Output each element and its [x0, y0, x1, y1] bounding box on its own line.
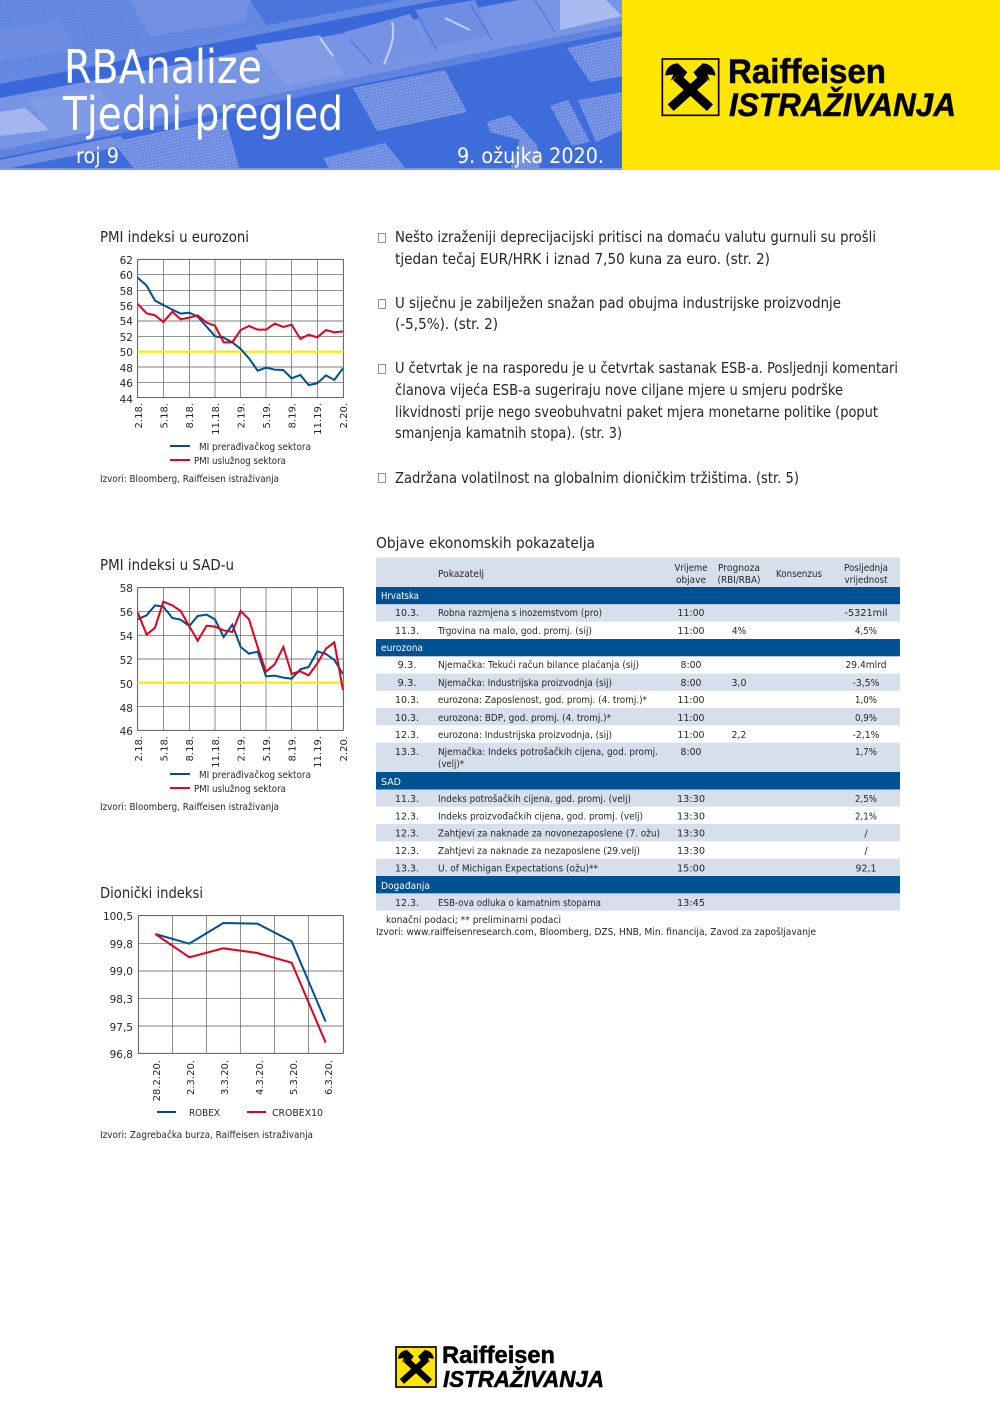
chart legend: CROBEX10	[272, 1108, 323, 1119]
bullet 3: likvidnosti prije nego sveobuhvatni paket mjera monetarne politike (poput	[395, 403, 878, 421]
chart heading: PMI indeksi u SAD-u	[100, 556, 234, 574]
row: U. of Michigan Expectations (ožu)**	[438, 862, 598, 874]
line chart: 50	[120, 347, 133, 359]
row	[376, 893, 900, 911]
header banner	[0, 0, 622, 170]
line chart: 48	[120, 703, 133, 715]
table header row: Posljednja	[844, 563, 888, 574]
section: eurozona	[376, 639, 900, 656]
line chart: 5.19.	[262, 736, 273, 761]
row: 15:00	[677, 864, 705, 874]
row: 4,5%	[855, 626, 877, 637]
yellow logo panel	[622, 0, 1000, 170]
bullet 2	[378, 294, 841, 333]
section: Događanja: Događanja	[381, 881, 430, 892]
line chart: 8.19.	[288, 736, 298, 761]
bullet 1: Nešto izraženiji deprecijacijski pritisci na domaću valutu gurnuli su prošli	[395, 228, 876, 246]
table header row: Konsenzus	[776, 569, 822, 580]
chart legend: PMI uslužnog sektora	[194, 783, 286, 795]
row: Njemačka: Indeks potrošačkih cijena, god. promj.	[438, 746, 658, 758]
chart legend	[157, 1108, 323, 1119]
row: 10.3.	[395, 608, 419, 619]
table footnotes: konačni podaci; ** preliminarni podaci	[386, 914, 561, 926]
line chart: 28.2.20.	[152, 1060, 163, 1101]
row: 10.3.	[395, 713, 419, 724]
chart legend: PMI uslužnog sektora	[194, 455, 286, 467]
panel: economic releases table	[376, 534, 900, 938]
chart legend: ROBEX	[189, 1108, 220, 1119]
bullet 3	[378, 359, 898, 442]
line chart: 52	[120, 332, 133, 344]
brand name: Raiffeisen	[728, 53, 886, 91]
issue number: roj 9	[76, 144, 119, 168]
row: 11.3.	[395, 794, 419, 805]
table heading: Objave ekonomskih pokazatelja	[376, 534, 595, 552]
bullet 4: Zadržana volatilnost na globalnim dioničkim tržištima. (str. 5)	[395, 469, 799, 487]
panel: PMI USA chart	[100, 556, 350, 813]
line chart: 52	[120, 655, 133, 667]
row: 10.3.	[395, 695, 419, 706]
row: Njemačka: Tekući račun bilance plaćanja (sij)	[438, 659, 639, 671]
line chart: 100,5	[103, 911, 133, 923]
row: 12.3.	[395, 898, 419, 909]
line chart: 46	[120, 726, 133, 738]
row	[376, 859, 900, 876]
row: -5321mil	[844, 608, 888, 619]
row: 12.3.	[395, 828, 419, 840]
row: 2,2	[732, 730, 746, 741]
line chart: 58	[120, 286, 133, 298]
row: 11.3.	[395, 626, 419, 637]
line chart: 50	[120, 679, 133, 691]
row: 8:00	[680, 660, 702, 671]
section: eurozona: eurozona	[381, 643, 423, 654]
line chart: 2.18.	[134, 403, 145, 428]
section: Hrvatska: Hrvatska	[381, 591, 419, 602]
line chart: 11.19.	[313, 736, 324, 768]
row: 8:00	[680, 747, 702, 758]
row: Njemačka: Industrijska proizvodnja (sij)	[438, 677, 612, 689]
row: 12.3.	[395, 846, 419, 857]
brand division: ISTRAŽIVANJA	[443, 1365, 604, 1392]
row	[395, 810, 877, 822]
chart legend: MI prerađivačkog sektora	[199, 441, 311, 453]
row: ESB-ova odluka o kamatnim stopama	[438, 898, 601, 909]
row: 13:30	[677, 794, 705, 805]
row	[376, 674, 900, 691]
section: Hrvatska	[376, 587, 900, 604]
row: Indeks proizvođačkih cijena, god. promj. (velj)	[438, 810, 643, 822]
row: Robna razmjena s inozemstvom (pro)	[438, 608, 602, 619]
row: 29.4mlrd	[846, 660, 886, 671]
table header row: Pokazatelj	[438, 569, 484, 580]
row: /	[864, 828, 868, 840]
row: Zahtjevi za naknade za nezaposlene (29.velj)	[438, 846, 640, 857]
table footnotes	[376, 914, 816, 938]
row	[398, 659, 886, 671]
brand name: Raiffeisen	[442, 1342, 555, 1369]
chart heading: Dionički indeksi	[100, 884, 203, 902]
row: 12.3.	[395, 730, 419, 741]
row: 11:00	[678, 730, 704, 741]
row: 11:00	[678, 713, 704, 724]
row: 13:30	[677, 812, 705, 822]
row	[395, 695, 877, 706]
line chart: 99,0	[110, 966, 133, 978]
line chart: 44	[120, 394, 133, 406]
row: 92,1	[856, 864, 876, 874]
bullet 2: (-5,5%). (str. 2)	[395, 315, 498, 333]
line chart: 4.3.20.	[255, 1060, 266, 1095]
row: 12.3.	[395, 812, 419, 822]
chart source: Izvori: Zagrebačka burza, Raiffeisen istraživanja	[100, 1129, 313, 1141]
bullet 3: U četvrtak je na rasporedu je u četvrtak sastanak ESB-a. Posljednji komentari	[395, 359, 898, 377]
table header row: (RBI/RBA)	[718, 575, 760, 586]
bullet 3: članova vijeća ESB-a sugeriraju nove ciljane mjere u smjeru podrške	[395, 381, 843, 399]
line chart: 5.18.	[160, 736, 170, 761]
row: 11:00	[678, 695, 704, 706]
row: 9.3.	[398, 678, 416, 689]
line chart: 11.18.	[211, 403, 222, 435]
line chart: 98,3	[110, 994, 133, 1006]
table header row: objave	[676, 575, 706, 586]
row: 11:00	[678, 608, 704, 619]
section: SAD	[376, 772, 900, 790]
row: 13:30	[677, 846, 705, 857]
line chart: 5.3.20.	[289, 1060, 300, 1095]
chart source: Izvori: Bloomberg, Raiffeisen istraživanja	[100, 801, 279, 813]
line chart: 48	[120, 363, 133, 375]
row: 8:00	[680, 678, 702, 689]
row	[376, 743, 900, 772]
chart legend	[170, 441, 311, 467]
row: Zahtjevi za naknade za novonezaposlene (7. ožu)	[438, 828, 660, 840]
line chart: 56	[120, 301, 133, 313]
line chart: 2.20.	[339, 403, 350, 428]
line chart: 54	[120, 631, 133, 643]
line chart: 99,8	[110, 939, 133, 951]
row	[376, 708, 900, 725]
line chart: 2.20.	[339, 736, 350, 761]
row: 2,5%	[855, 794, 877, 805]
brand division: ISTRAŽIVANJA	[729, 87, 956, 123]
line chart: 3.3.20.	[220, 1060, 231, 1095]
row: 1,7%	[855, 747, 877, 758]
row	[376, 824, 900, 841]
bullet 3: smanjenja kamatnih stopa). (str. 3)	[395, 424, 622, 442]
chart source: Izvori: Bloomberg, Raiffeisen istraživanja	[100, 473, 279, 485]
report title	[62, 40, 343, 141]
line chart	[103, 911, 343, 1101]
line chart	[120, 255, 350, 435]
row: -3,5%	[852, 678, 880, 689]
line chart: 58	[120, 583, 133, 595]
chart legend: MI prerađivačkog sektora	[199, 769, 311, 781]
row: 13:30	[677, 828, 705, 840]
line chart: 97,5	[110, 1022, 133, 1034]
line chart: 60	[120, 270, 133, 282]
line chart: 5.19.	[262, 403, 273, 428]
section: SAD: SAD	[381, 777, 401, 788]
row: eurozona: Industrijska proizvodnja, (sij)	[438, 730, 612, 741]
row: 3,0	[732, 678, 746, 689]
chart legend	[170, 769, 311, 795]
section: Događanja	[376, 876, 900, 893]
row: 13:45	[677, 898, 705, 909]
bullet 1	[378, 228, 876, 268]
row: eurozona: Zaposlenost, god. promj. (4. tromj.)*	[438, 695, 647, 706]
row	[395, 730, 880, 741]
line chart: 8.18.	[185, 736, 196, 761]
row: Trgovina na malo, god. promj. (sij)	[437, 626, 592, 637]
row: 4%	[732, 626, 746, 637]
report title: RBAnalize	[64, 40, 262, 94]
row: eurozona: BDP, god. promj. (4. tromj.)*	[438, 713, 611, 724]
icon: Raiffeisen crossed gables	[396, 1347, 436, 1387]
line chart: 2.19.	[236, 736, 248, 761]
line chart: 62	[120, 255, 133, 267]
table header row: Prognoza	[718, 563, 760, 574]
table footnotes: Izvori: www.raiffeisenresearch.com, Bloomberg, DZS, HNB, Min. financija, Zavod za zapošljavanje	[376, 926, 816, 938]
row: 2,1%	[855, 812, 877, 822]
panel: PMI eurozone chart	[100, 228, 350, 485]
line chart	[120, 583, 350, 768]
table header row: vrijednost	[844, 575, 888, 586]
line chart: 96,8	[110, 1049, 133, 1061]
line chart: 6.3.20.	[324, 1060, 335, 1095]
line chart: 11.19.	[313, 403, 324, 435]
report title: Tjedni pregled	[62, 87, 343, 141]
row: 0,9%	[855, 713, 877, 724]
row: 11:00	[678, 626, 704, 637]
row	[376, 790, 900, 807]
row	[395, 846, 868, 857]
line chart: 46	[120, 378, 133, 390]
row	[376, 604, 900, 622]
footer logo	[396, 1342, 604, 1392]
chart heading: PMI indeksi u eurozoni	[100, 228, 249, 246]
text block: key highlights	[378, 228, 898, 487]
bullet 1: tjedan tečaj EUR/HRK i iznad 7,50 kuna za euro. (str. 2)	[395, 250, 770, 268]
row: 13.3.	[395, 747, 419, 758]
row	[395, 626, 877, 637]
line chart: 8.18.	[185, 403, 196, 428]
table header row: Vrijeme	[674, 563, 708, 574]
row: 1,0%	[855, 695, 877, 706]
line chart: 2.3.20.	[186, 1060, 197, 1095]
line chart: 54	[120, 316, 133, 328]
header background image	[0, 0, 622, 170]
date: 9. ožujka 2020.	[457, 144, 604, 168]
row: 13.3.	[395, 864, 419, 874]
line chart: 56	[120, 607, 133, 619]
table header row	[376, 558, 900, 587]
bullet 2: U siječnu je zabilježen snažan pad obujma industrijske proizvodnje	[395, 294, 841, 312]
line chart: 2.19.	[236, 403, 248, 428]
row: Indeks potrošačkih cijena, god. promj. (velj)	[438, 793, 631, 805]
line chart: 11.18.	[211, 736, 222, 768]
line chart: 2.18.	[134, 736, 145, 761]
icon: Raiffeisen crossed gables	[662, 59, 719, 115]
panel: stock indices chart	[100, 884, 343, 1141]
row: 9.3.	[398, 660, 416, 671]
row: -2,1%	[852, 730, 880, 741]
line chart: 5.18.	[160, 403, 170, 428]
line chart: 8.19.	[288, 403, 298, 428]
row: /	[864, 846, 868, 857]
row: (velj)*	[438, 759, 464, 770]
